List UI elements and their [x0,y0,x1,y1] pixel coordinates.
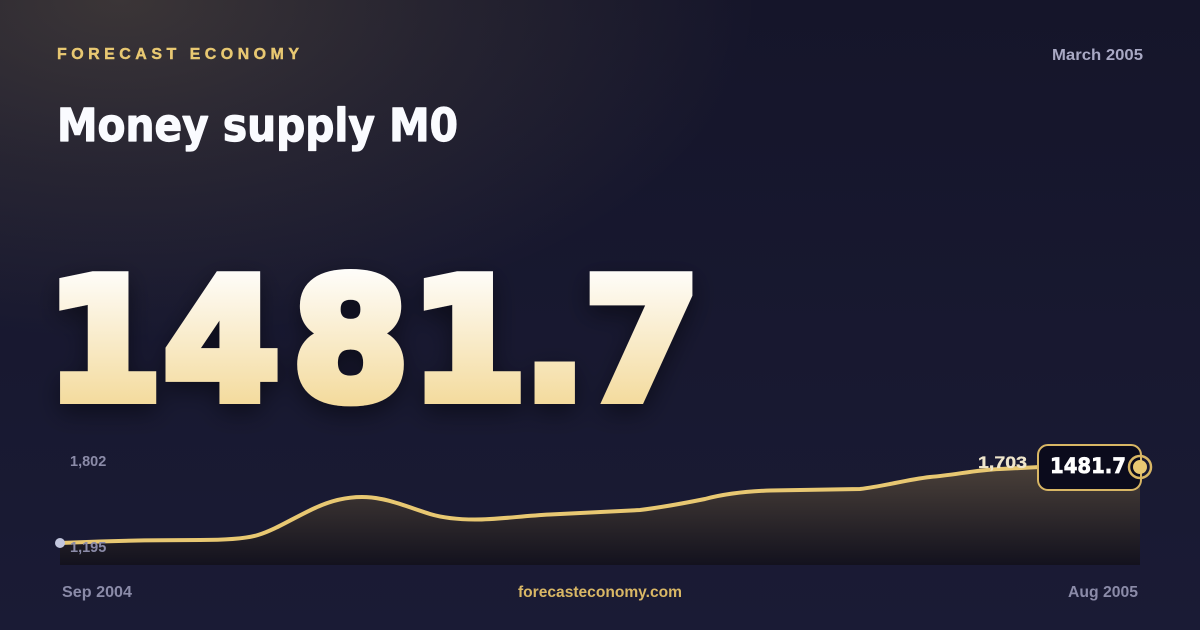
big value: 1481.7 [46,244,700,438]
price line [60,467,1040,543]
chart [55,445,1151,565]
title: Money supply M0 [57,99,458,152]
value badge: 1481.7 [1050,454,1126,478]
start date: Sep 2004 [62,584,132,601]
axis max label: 1,802 [70,454,106,470]
area under line [60,466,1140,565]
value badge [1038,445,1141,490]
axis min label: 1,195 [70,540,106,556]
site url: forecasteconomy.com [518,584,682,601]
date: March 2005 [1052,47,1143,64]
end point marker [1129,456,1151,478]
end date: Aug 2005 [1068,584,1138,601]
peak label: 1,703 [978,453,1027,472]
start point [55,538,65,548]
brand eyebrow: FORECAST ECONOMY [57,46,299,63]
